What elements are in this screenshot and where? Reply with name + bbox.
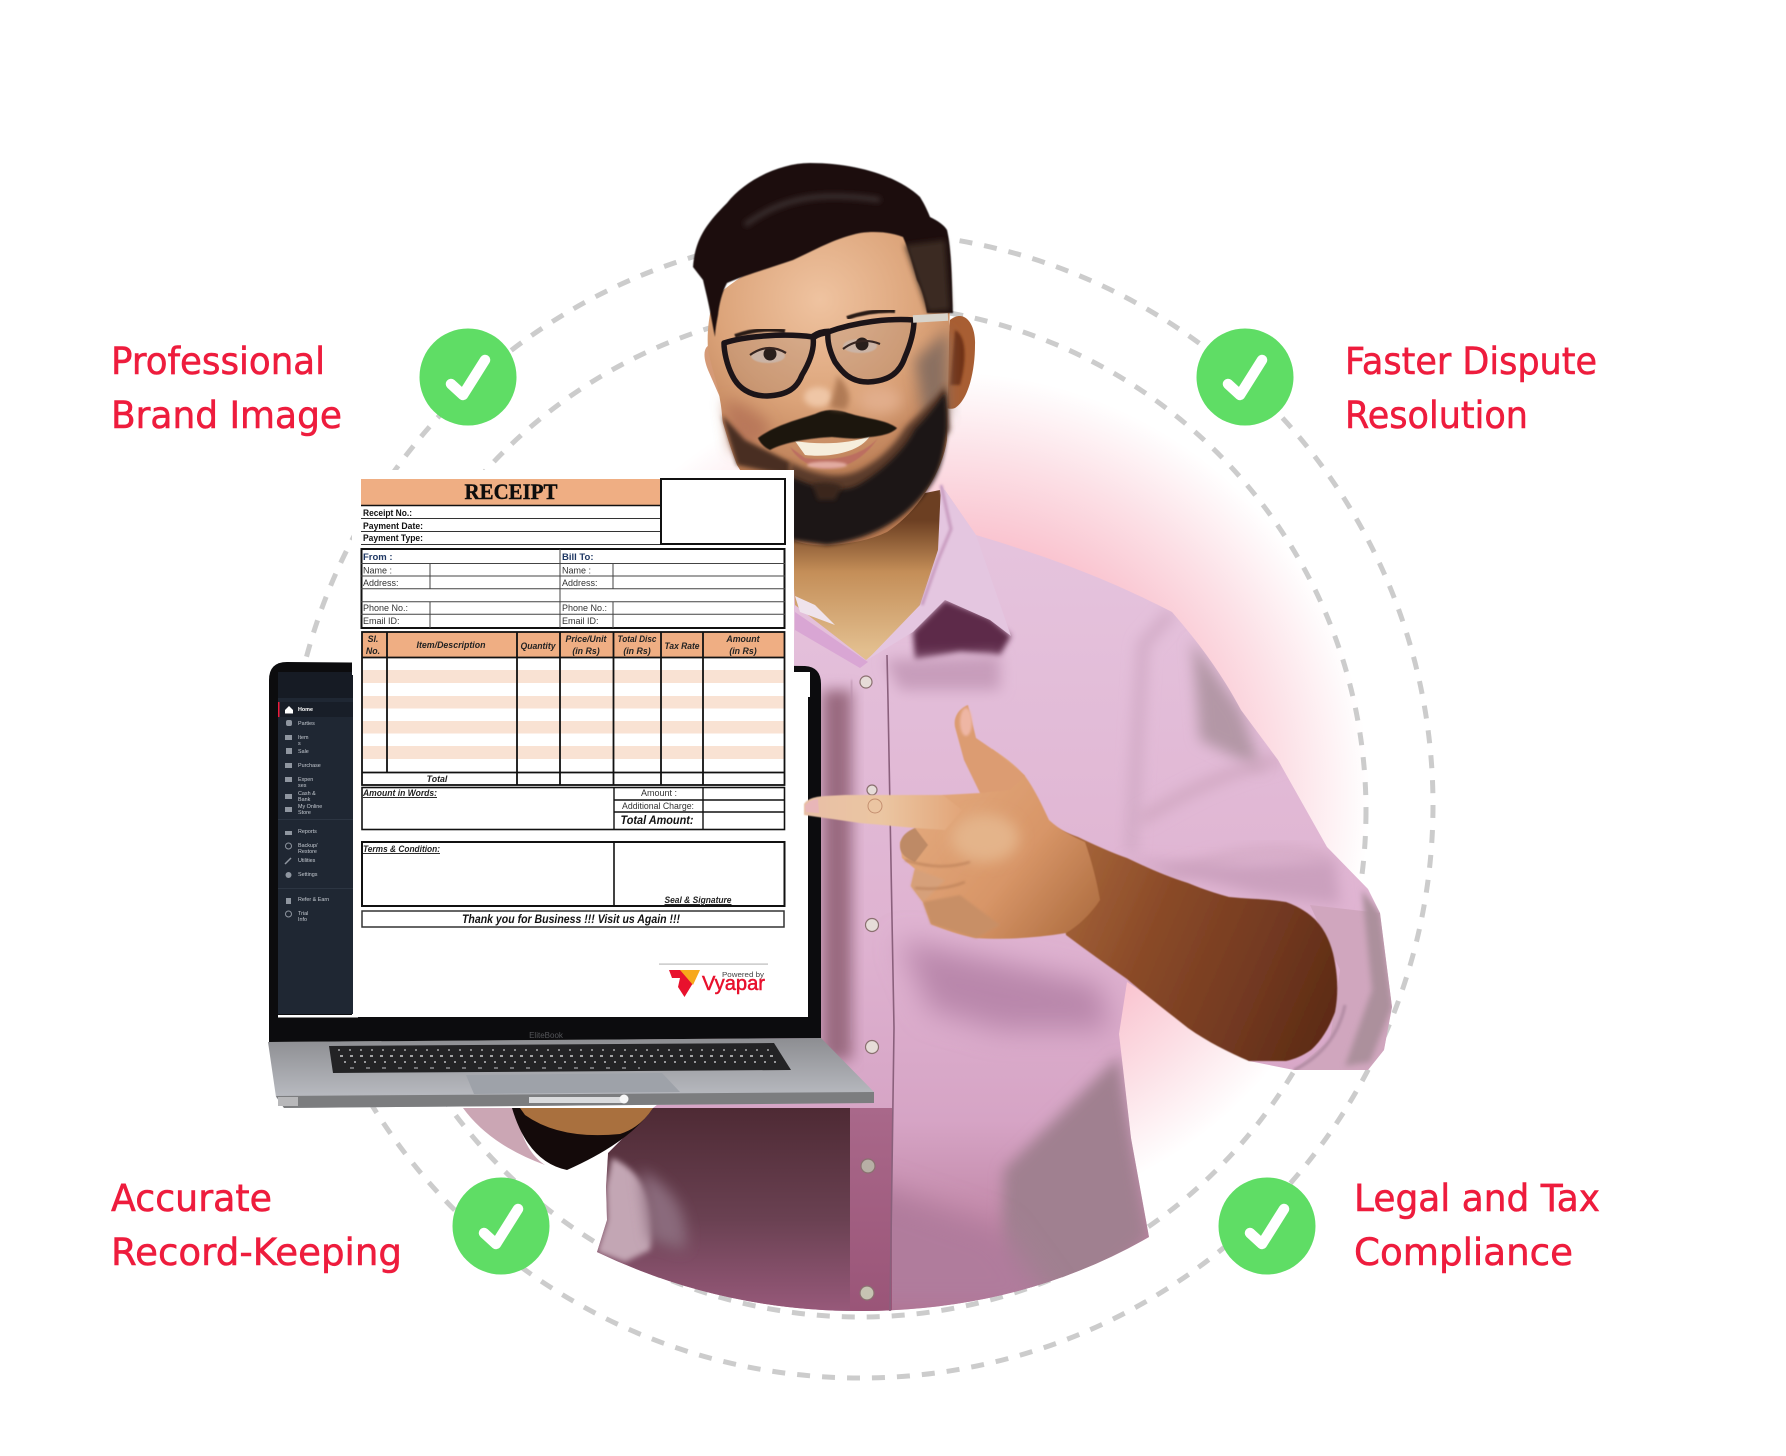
label: faster dispute resolution [1345, 340, 1597, 437]
from and bill to block: Phone No.: [363, 603, 408, 613]
label: professional brand image: Brand Image [111, 394, 342, 437]
app sidebar: Reports [298, 829, 317, 835]
thank you strip: Thank you for Business !!! Visit us Again !!! [462, 914, 680, 926]
app sidebar: Settings [298, 872, 318, 878]
shirt placket line [887, 655, 894, 1311]
label: legal and tax compliance [1354, 1177, 1600, 1274]
amount box: Amount in Words: [362, 788, 437, 799]
from and bill to block: Address: [363, 578, 399, 588]
from and bill to block: Address: [562, 578, 598, 588]
item table: Price/Unit [566, 634, 608, 644]
terms and signature box: Terms & Condition: [363, 844, 440, 855]
item table: No. [366, 646, 380, 656]
item table: Total [427, 774, 448, 784]
app sidebar: Home [298, 707, 313, 713]
nose [804, 387, 832, 407]
eyes [751, 349, 785, 363]
app sidebar: Refer & Earn [298, 897, 329, 903]
label: faster dispute resolution: Faster Dispute [1345, 340, 1597, 383]
shirt under laptop [597, 1108, 850, 1311]
app sidebar: Parties [298, 721, 315, 727]
beard stubble edge [790, 385, 950, 520]
from and bill to block: From : [363, 552, 393, 563]
app sidebar: Expen [298, 777, 313, 783]
infographic canvas [110, 162, 1600, 1380]
from and bill to block: Email ID: [363, 616, 400, 626]
lower lip [790, 438, 878, 468]
receipt header: RECEIPT [464, 479, 558, 504]
laptop lid [269, 662, 821, 1042]
from and bill to block: Email ID: [562, 616, 599, 626]
from and bill to block: Name : [363, 566, 392, 576]
item table: Amount [725, 634, 761, 644]
thank you strip [362, 911, 784, 927]
item table: (in Rs) [572, 646, 600, 656]
app sidebar: ses [298, 783, 307, 789]
right temple fade [905, 240, 950, 312]
man: pointing forearm and hand [804, 705, 1337, 1061]
check: legal and tax compliance [1218, 1178, 1316, 1274]
app sidebar: Store [298, 810, 311, 816]
item table: Item/Description [417, 640, 485, 650]
vyapar logo: Vyapar [702, 973, 765, 995]
left stubble [722, 415, 790, 476]
amount box [362, 787, 785, 830]
cheek shading [725, 400, 770, 450]
app sidebar: Cash & [298, 791, 316, 797]
terms and signature box: Seal & Signature [664, 895, 732, 906]
chest under collar shadow [913, 600, 1011, 660]
face [708, 225, 950, 545]
mustache [758, 410, 897, 450]
index finger [804, 795, 962, 830]
item table: Sl. [368, 634, 378, 644]
app sidebar: Bank [298, 797, 311, 803]
forearm [1050, 825, 1337, 1061]
app sidebar: My Online [298, 804, 322, 810]
outer dashed circle [287, 232, 1433, 1378]
man: arm holding laptop [463, 1108, 653, 1170]
terms and signature box [362, 842, 784, 906]
check: professional brand image [420, 328, 516, 426]
from and bill to block [361, 549, 785, 628]
from and bill to block: Phone No.: [562, 603, 607, 613]
app sidebar: Trial [298, 911, 308, 917]
from and bill to block: Bill To: [562, 552, 593, 563]
label: legal and tax compliance: Compliance [1354, 1231, 1573, 1274]
app sidebar [278, 672, 353, 1014]
receipt document [352, 470, 794, 997]
man: torso and shirt [597, 490, 1392, 1312]
vyapar logo [659, 964, 768, 997]
app sidebar: Item [298, 735, 309, 741]
left ear [704, 345, 722, 402]
label: legal and tax compliance: Legal and Tax [1354, 1177, 1600, 1220]
eyebrows [735, 330, 785, 336]
receipt header: Receipt No.: [363, 508, 412, 519]
man: neck and collar [790, 485, 1011, 668]
receipt header [361, 479, 785, 544]
app sidebar: Restore [298, 849, 317, 855]
trackpad [466, 1073, 680, 1094]
label: accurate record-keeping: Accurate [111, 1177, 272, 1220]
check: accurate record-keeping [452, 1178, 550, 1274]
item table: Total Disc [618, 634, 657, 644]
glasses [724, 320, 914, 396]
shirt buttons [860, 676, 878, 1300]
label: accurate record-keeping [111, 1177, 402, 1274]
teeth [795, 436, 870, 456]
item table [362, 632, 785, 785]
curled fingers [900, 828, 928, 862]
brand mark on bezel: EliteBook [529, 1031, 564, 1040]
hair [693, 163, 953, 337]
laptop [268, 662, 874, 1108]
item table: Tax Rate [664, 641, 700, 651]
inner dashed circle [354, 305, 1366, 1317]
app sidebar: Sale [298, 749, 309, 755]
app sidebar: Info [298, 917, 307, 923]
amount box: Total Amount: [620, 813, 694, 827]
item table: (in Rs) [729, 646, 757, 656]
beard [790, 392, 947, 545]
app sidebar: Utilities [298, 858, 316, 864]
right cheek shadow [915, 330, 948, 420]
front lip [276, 1092, 874, 1108]
from and bill to block: Name : [562, 566, 591, 576]
item table: (in Rs) [623, 646, 651, 656]
vyapar logo: Powered by [722, 972, 765, 979]
item table: Quantity [520, 641, 557, 651]
receipt header: Payment Date: [363, 521, 423, 532]
man: head [693, 163, 975, 545]
app sidebar: Backup/ [298, 843, 318, 849]
pink radial glow [520, 372, 1370, 1222]
label: faster dispute resolution: Resolution [1345, 394, 1528, 437]
receipt header: Payment Type: [363, 533, 423, 544]
keyboard [329, 1043, 791, 1073]
label: professional brand image [111, 340, 342, 437]
label: accurate record-keeping: Record-Keeping [111, 1231, 402, 1274]
right ear [943, 316, 975, 409]
laptop base [268, 1038, 874, 1108]
amount box: Additional Charge: [622, 801, 694, 811]
thumb [955, 705, 1025, 793]
check: faster dispute resolution [1196, 328, 1294, 426]
app sidebar: Purchase [298, 763, 321, 769]
app sidebar: s [298, 741, 301, 747]
label: professional brand image: Professional [111, 340, 325, 383]
screen white [352, 672, 808, 1017]
hand back [900, 749, 1100, 939]
amount box: Amount : [641, 788, 677, 798]
